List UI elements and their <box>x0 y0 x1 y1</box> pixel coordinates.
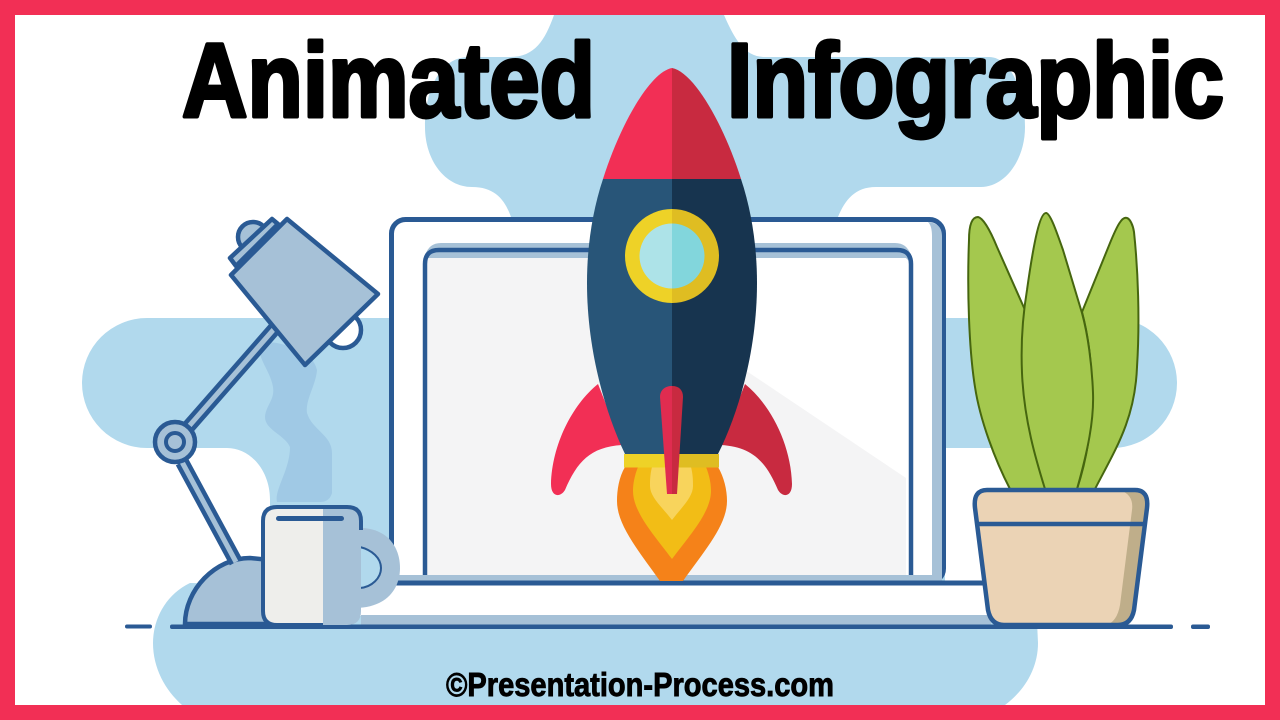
rocket body <box>587 179 757 454</box>
porthole window <box>625 209 719 303</box>
rocket nose <box>603 68 741 179</box>
desk lamp <box>155 219 378 624</box>
ground line <box>125 624 1210 629</box>
centre fin <box>660 386 683 494</box>
steam from mug <box>260 342 332 502</box>
flame <box>617 467 727 581</box>
coffee mug <box>263 507 400 625</box>
leaves <box>968 213 1138 489</box>
left and right fins <box>551 384 792 495</box>
pot shading <box>1106 490 1147 625</box>
engine collar <box>624 454 719 468</box>
potted plant <box>968 213 1147 625</box>
website credit: ©Presentation-Process.com <box>446 666 834 703</box>
title <box>182 22 1224 140</box>
pot outline <box>975 490 1147 625</box>
laptop <box>360 220 991 625</box>
title: Animated <box>182 22 595 140</box>
rocket <box>551 68 792 581</box>
flower pot <box>975 490 1147 625</box>
